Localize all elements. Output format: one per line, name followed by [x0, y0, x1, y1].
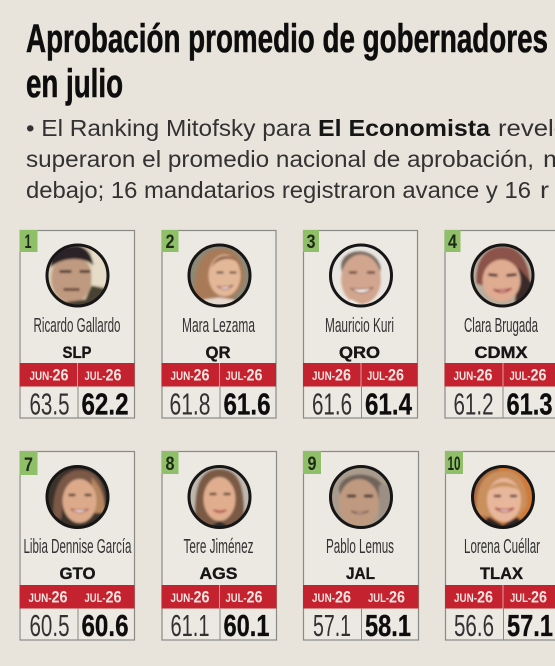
- values: [454, 608, 553, 643]
- card 4: Clara Brugada: [444, 230, 555, 422]
- values: 56.6: [454, 608, 494, 643]
- state: GTO: [60, 565, 96, 583]
- title: en julio: [26, 62, 123, 106]
- values: 62.2: [82, 386, 128, 422]
- values: [30, 386, 128, 422]
- month header band: 26: [52, 366, 68, 384]
- intro text: debajo; 16 mandatarios registraron avance y 16: [26, 177, 531, 203]
- intro text: superaron el promedio nacional de aprobación,: [26, 146, 534, 172]
- month header band: 26: [106, 588, 122, 606]
- state: QRO: [339, 344, 380, 362]
- name: Libia Dennise García: [24, 536, 132, 558]
- month header band: [444, 363, 555, 386]
- photo: Mauricio Kuri: [329, 244, 393, 308]
- values: 57.1: [313, 608, 351, 643]
- rank tag 3: [303, 230, 319, 253]
- values: 61.1: [170, 608, 210, 643]
- values: 61.8: [170, 386, 210, 422]
- values: [313, 608, 411, 643]
- rank tag 9: [303, 451, 321, 475]
- month header band: [162, 585, 276, 608]
- values: 60.6: [82, 608, 128, 643]
- month header band: 26: [194, 366, 210, 384]
- intro text: [26, 115, 555, 203]
- values: [30, 608, 128, 643]
- photo: Pablo Lemus: [329, 465, 393, 529]
- card 7: Libia Dennise García: [20, 451, 134, 643]
- card 1: Ricardo Gallardo: [20, 230, 134, 422]
- rank tag 9: 9: [308, 454, 316, 475]
- state: SLP: [62, 344, 92, 362]
- rank tag 10: 10: [448, 454, 460, 475]
- month header band: JUN-: [170, 591, 194, 605]
- card 3: Mauricio Kuri: [303, 230, 418, 422]
- month header band: JUL-: [226, 369, 246, 383]
- intro text: r: [540, 177, 549, 203]
- month header band: JUN-: [454, 369, 476, 383]
- values: 61.4: [365, 386, 413, 422]
- name: Ricardo Gallardo: [34, 315, 120, 337]
- month header band: 26: [52, 588, 68, 606]
- month header band: 26: [531, 588, 547, 606]
- state: CDMX: [474, 344, 528, 362]
- values: 60.1: [224, 608, 270, 643]
- month header band: 26: [477, 588, 493, 606]
- month header band: 26: [335, 588, 351, 606]
- month header band: [20, 585, 134, 608]
- rank tag 4: 4: [448, 232, 457, 253]
- month header band: JUL-: [510, 591, 531, 605]
- month header band: JUL-: [84, 369, 106, 383]
- month header band: 26: [335, 366, 351, 384]
- month header band: JUL-: [84, 591, 106, 605]
- month header band: [303, 585, 418, 608]
- values: [454, 386, 552, 422]
- name: Tere Jiménez: [184, 536, 254, 558]
- state: QR: [206, 344, 231, 362]
- month header band: 26: [389, 588, 405, 606]
- month header band: [303, 363, 418, 386]
- state: TLAX: [480, 565, 523, 583]
- values: [170, 608, 270, 643]
- photo: Clara Brugada: [470, 244, 534, 308]
- month header band: 26: [530, 366, 546, 384]
- rank tag 7: [20, 451, 38, 476]
- month header band: JUN-: [312, 369, 335, 383]
- rank tag 2: [162, 230, 178, 253]
- month header band: 26: [194, 588, 210, 606]
- state: JAL: [346, 565, 375, 583]
- month header band: JUL-: [368, 591, 389, 605]
- rank tag 1: 1: [24, 232, 32, 253]
- month header band: [20, 363, 134, 386]
- photo: Mara Lezama: [188, 244, 252, 308]
- rank tag 8: [162, 451, 178, 475]
- values: [312, 386, 413, 422]
- card 10: Lorena Cuéllar: [445, 451, 555, 643]
- title: [26, 17, 548, 106]
- state: AGS: [200, 565, 238, 583]
- month header band: JUN-: [312, 591, 335, 605]
- month header band: JUL-: [226, 591, 246, 605]
- photo: Lorena Cuéllar: [471, 465, 535, 529]
- card 2: Mara Lezama: [162, 230, 276, 422]
- month header band: JUL-: [510, 369, 530, 383]
- month header band: JUN-: [28, 591, 52, 605]
- rank tag 3: 3: [306, 232, 316, 253]
- photo: Libia Dennise García: [46, 465, 110, 529]
- rank tag 2: 2: [166, 232, 174, 253]
- values: 60.5: [30, 608, 70, 643]
- rank tag 1: [20, 230, 38, 253]
- values: [170, 386, 270, 422]
- month header band: [162, 363, 276, 386]
- month header band: 26: [246, 366, 262, 384]
- month header band: 26: [106, 366, 122, 384]
- values: 61.2: [454, 386, 494, 422]
- card 9: Pablo Lemus: [303, 451, 418, 643]
- month header band: JUN-: [454, 591, 477, 605]
- values: 61.6: [224, 386, 270, 422]
- photo: Ricardo Gallardo: [46, 244, 110, 308]
- values: 58.1: [365, 608, 411, 643]
- rank tag 4: [444, 230, 460, 253]
- photo: Tere Jiménez: [188, 465, 252, 529]
- month header band: 26: [476, 366, 492, 384]
- name: Pablo Lemus: [326, 536, 394, 558]
- rank tag 7: 7: [24, 455, 33, 476]
- month header band: JUN-: [30, 369, 52, 383]
- month header band: [445, 585, 555, 608]
- month header band: JUL-: [367, 369, 388, 383]
- month header band: 26: [388, 366, 404, 384]
- intro text: El Economista: [318, 115, 490, 141]
- card 8: Tere Jiménez: [162, 451, 276, 643]
- values: 63.5: [30, 386, 70, 422]
- name: Mauricio Kuri: [325, 315, 394, 337]
- name: Mara Lezama: [182, 315, 256, 337]
- rank tag 10: [445, 451, 463, 475]
- intro text: • El Ranking Mitofsky para: [26, 115, 311, 141]
- rank tag 8: 8: [166, 454, 174, 475]
- values: 61.6: [312, 386, 352, 422]
- month header band: 26: [246, 588, 262, 606]
- month header band: JUN-: [170, 369, 194, 383]
